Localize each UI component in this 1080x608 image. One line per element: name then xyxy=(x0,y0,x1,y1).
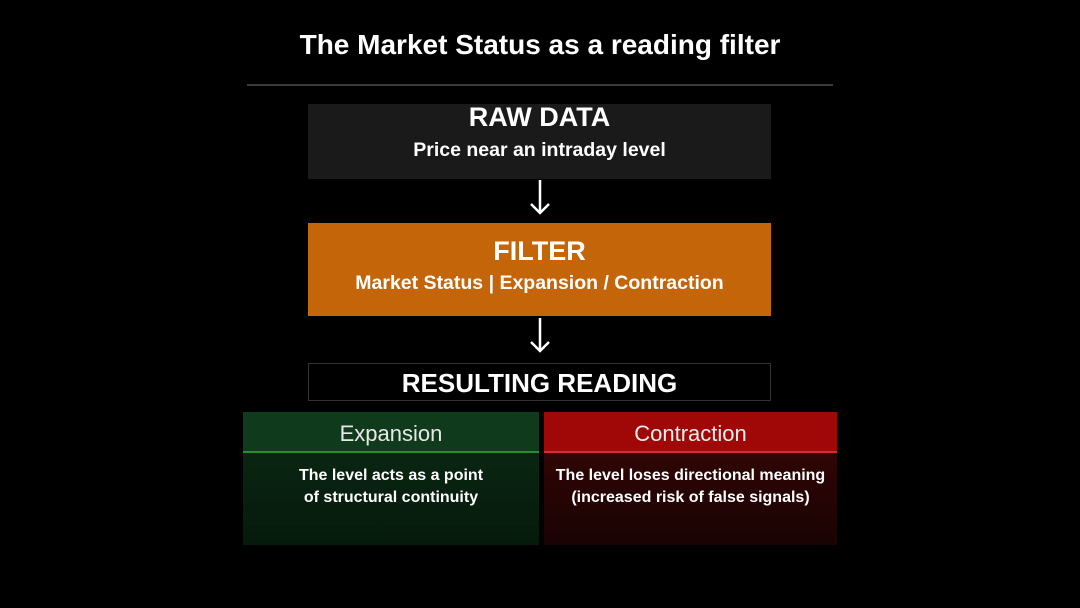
text: raw data description: Price near an intraday level xyxy=(413,139,666,161)
arrow: filter to reading xyxy=(530,318,550,353)
header: contraction xyxy=(544,412,837,453)
panel: expansion xyxy=(243,412,539,545)
text: filter description: Market Status | Expansion / Contraction xyxy=(355,272,724,294)
text: expansion description: of structural continuity xyxy=(304,489,478,506)
heading: resulting reading: RESULTING READING xyxy=(402,368,677,398)
text: contraction description: The level loses directional meaning xyxy=(556,467,825,484)
text: contraction description xyxy=(556,467,825,506)
header: expansion: Expansion xyxy=(340,421,442,446)
title: The Market Status as a reading filter xyxy=(300,29,780,60)
heading: resulting reading xyxy=(308,363,771,401)
text: expansion description xyxy=(299,467,483,506)
panel: raw data xyxy=(308,104,771,179)
heading: filter: FILTER xyxy=(493,236,586,266)
heading: raw data: RAW DATA xyxy=(469,102,610,132)
header: expansion xyxy=(243,412,539,453)
text: contraction description: (increased risk of false signals) xyxy=(571,489,810,506)
arrow: raw to filter xyxy=(530,180,550,215)
header: contraction: Contraction xyxy=(634,421,747,446)
panel: filter xyxy=(308,223,771,316)
panel: contraction xyxy=(544,412,837,545)
text: expansion description: The level acts as a point xyxy=(299,467,483,484)
